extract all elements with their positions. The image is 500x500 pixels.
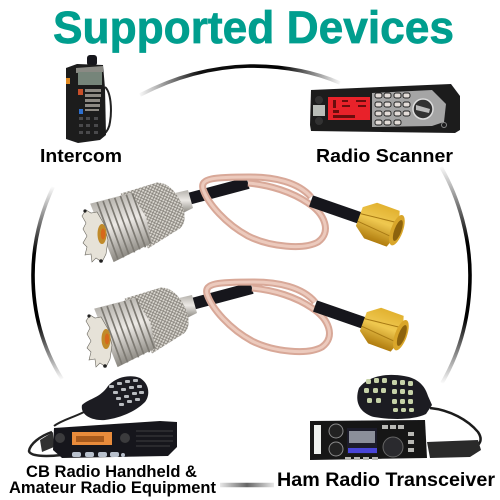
label: CB radio and amateur equipment: Amateur Radio Equipment xyxy=(9,478,216,497)
icon: ham radio transceiver with microphone xyxy=(310,375,481,460)
label: intercom: Intercom xyxy=(40,146,122,166)
UHF body xyxy=(90,174,193,263)
icon: radio scanner xyxy=(310,84,460,133)
black heat shrink on SMA side xyxy=(311,201,360,218)
title: Supported Devices xyxy=(53,2,454,53)
rose cable loop xyxy=(203,177,325,247)
cable assembly: lower xyxy=(86,279,413,368)
label: ham radio transceiver: Ham Radio Transceiver xyxy=(277,470,496,491)
label: CB radio and amateur equipment xyxy=(9,462,216,497)
black heat shrink on UHF side xyxy=(188,183,248,199)
serrated washer and socket xyxy=(82,210,108,262)
SMA gold connector xyxy=(353,199,409,250)
icon: intercom handheld radio xyxy=(66,55,111,143)
cable assembly: upper xyxy=(82,174,409,263)
label: CB radio and amateur equipment: CB Radio Handheld & xyxy=(26,462,197,481)
icon: CB mobile radio with microphone xyxy=(29,376,177,458)
UHF neck xyxy=(175,190,193,213)
circular arcs around the cables xyxy=(33,66,470,485)
cable highlight xyxy=(203,177,325,247)
label: radio scanner: Radio Scanner xyxy=(316,146,453,166)
